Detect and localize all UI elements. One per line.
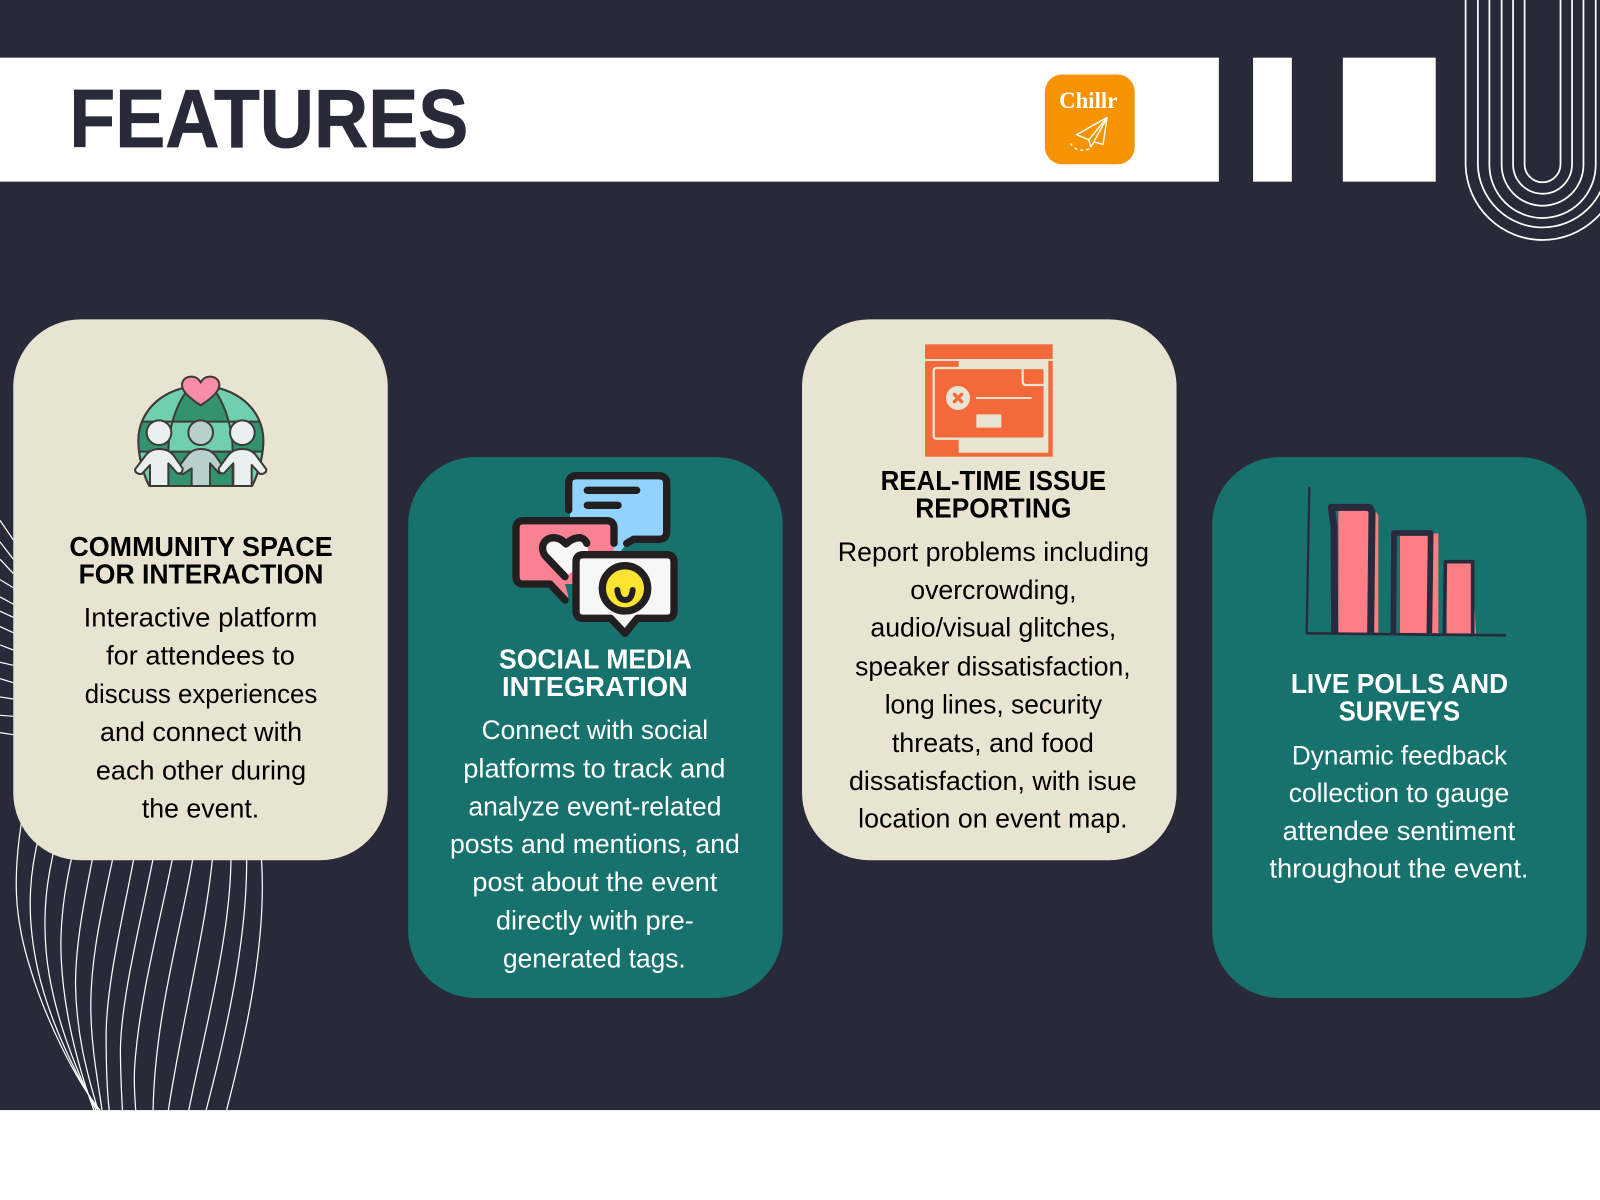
title: FEATURES <box>69 72 468 165</box>
logo: Chillr <box>1045 74 1135 164</box>
body text: dissatisfaction, with isue <box>849 766 1137 796</box>
icon: bar chart <box>1306 487 1506 635</box>
people <box>177 420 224 486</box>
heading <box>1291 668 1508 726</box>
heading <box>881 465 1106 523</box>
body text: generated tags. <box>503 943 686 973</box>
panel: community space <box>13 319 388 860</box>
decoration: flowing wires <box>0 520 262 1110</box>
header block medium <box>1343 58 1436 182</box>
heading: SOCIAL MEDIA <box>499 643 692 674</box>
logo: Chillr: Chillr <box>1059 88 1117 114</box>
heading: COMMUNITY SPACE <box>69 531 333 562</box>
heading: REAL-TIME ISSUE <box>881 465 1106 496</box>
icon: error window <box>925 344 1053 457</box>
body text: platforms to track and <box>463 754 726 784</box>
body text: Interactive platform <box>84 603 317 633</box>
body text: speaker dissatisfaction, <box>855 652 1131 682</box>
heading: INTEGRATION <box>502 671 688 702</box>
body text: collection to gauge <box>1289 778 1509 808</box>
body text: threats, and food <box>892 728 1094 758</box>
icon: paper plane <box>1070 117 1107 150</box>
icon: community globe <box>133 377 268 488</box>
icon: chat bubbles <box>516 476 674 633</box>
body text: and connect with <box>100 717 302 747</box>
body text: overcrowding, <box>910 575 1077 605</box>
body text: analyze event-related <box>468 791 721 821</box>
panel: real-time issue reporting <box>802 319 1177 860</box>
heading: LIVE POLLS AND <box>1291 668 1508 699</box>
heading: REPORTING <box>915 492 1071 523</box>
body text: throughout the event. <box>1269 854 1529 884</box>
heading <box>69 531 333 590</box>
heart <box>182 377 219 405</box>
body text: each other during <box>96 756 306 786</box>
body text: directly with pre- <box>496 906 694 936</box>
decoration: concentric arches <box>1466 0 1600 240</box>
body text: the event. <box>142 793 259 823</box>
body text <box>450 715 740 973</box>
body text: Dynamic feedback <box>1292 740 1508 770</box>
body text <box>1269 740 1529 884</box>
body text: discuss experiences <box>85 679 317 709</box>
panel: social media <box>408 457 783 998</box>
panel: live polls and surveys <box>1212 457 1587 998</box>
heading <box>499 643 692 702</box>
body text <box>838 537 1149 834</box>
heading: SURVEYS <box>1339 695 1460 726</box>
heading: FOR INTERACTION <box>79 559 323 590</box>
body text: Connect with social <box>482 715 708 745</box>
footer strip <box>0 1110 1600 1200</box>
body text: post about the event <box>472 867 718 897</box>
header band <box>0 58 1219 182</box>
header block small <box>1253 58 1292 182</box>
body text: audio/visual glitches, <box>870 613 1116 643</box>
body text: attendee sentiment <box>1283 816 1516 846</box>
body text: for attendees to <box>106 640 295 670</box>
body text: long lines, security <box>885 689 1103 719</box>
body text <box>84 603 317 823</box>
body text: location on event map. <box>858 804 1128 834</box>
body text: Report problems including <box>838 537 1149 567</box>
body text: posts and mentions, and <box>450 829 740 859</box>
